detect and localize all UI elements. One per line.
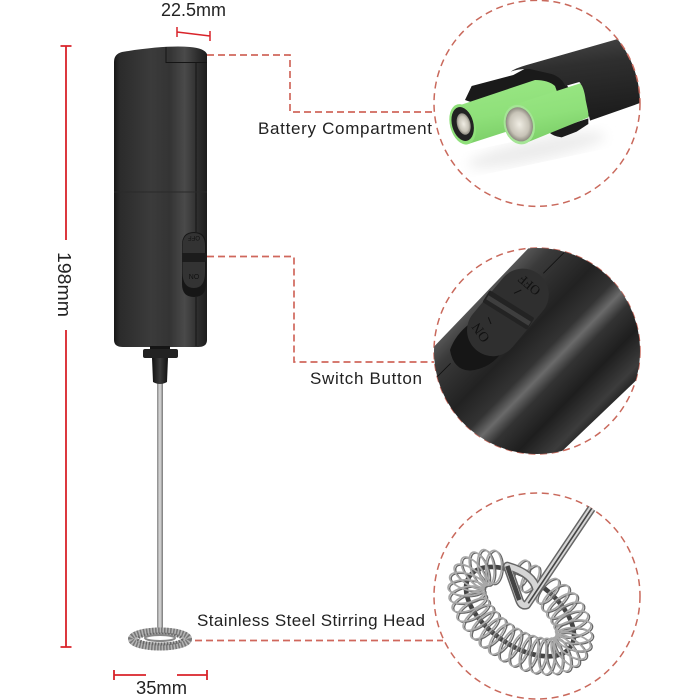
shadow bbox=[466, 125, 607, 175]
slider bbox=[467, 268, 548, 356]
circle outline bbox=[434, 493, 640, 699]
label: stirring head: Stainless Steel Stirring Head bbox=[197, 611, 425, 630]
dimension: height 198mm bbox=[54, 46, 74, 647]
circle outline bbox=[434, 0, 640, 206]
magnified body bbox=[434, 248, 640, 454]
drive stem bbox=[152, 358, 168, 384]
whisk head small bbox=[131, 630, 189, 648]
motor body bbox=[114, 47, 207, 347]
coil spring dark layer bbox=[449, 549, 594, 676]
body mid seam bbox=[114, 191, 207, 193]
label on: ON bbox=[470, 319, 494, 345]
whisk rod bbox=[157, 382, 163, 630]
recess bbox=[450, 326, 499, 370]
circle outline bbox=[434, 248, 640, 454]
lower tray bbox=[548, 118, 588, 137]
detail circle: battery compartment bbox=[434, 0, 653, 206]
leader line: battery compartment bbox=[207, 55, 434, 112]
switch label on: ON bbox=[189, 272, 199, 279]
switch label off: OFF bbox=[188, 234, 200, 240]
coil spring light layer bbox=[447, 548, 593, 675]
switch slider bbox=[182, 233, 205, 288]
label off: OFF bbox=[515, 272, 543, 299]
detail circle: stirring head bbox=[434, 493, 640, 699]
battery cover seams bbox=[166, 47, 207, 346]
front battery bbox=[499, 83, 589, 148]
switch recess bbox=[182, 232, 206, 297]
dimension: width 22.5mm: 22.5mm bbox=[161, 0, 226, 20]
detail circle: switch button bbox=[433, 247, 641, 455]
cover bbox=[510, 39, 640, 121]
leader line: switch button bbox=[207, 256, 434, 362]
back battery bbox=[445, 80, 560, 148]
label: battery compartment: Battery Compartment bbox=[258, 119, 432, 138]
collar bbox=[143, 349, 178, 358]
dimension: height 198mm: 198mm bbox=[54, 252, 74, 317]
frother device bbox=[114, 47, 207, 648]
label: switch button: Switch Button bbox=[310, 369, 422, 388]
switch bar bbox=[182, 253, 206, 262]
dimension: width 22.5mm bbox=[161, 0, 226, 41]
seam bbox=[437, 253, 564, 377]
leader line: stirring head bbox=[195, 640, 443, 642]
dimension: whisk width 35mm bbox=[114, 670, 207, 698]
back tray bbox=[465, 66, 593, 117]
dimension: whisk width 35mm: 35mm bbox=[136, 678, 187, 698]
neck bbox=[150, 346, 170, 351]
tick marks bbox=[488, 290, 521, 324]
spine wire bbox=[450, 549, 590, 674]
rod and bend bbox=[507, 508, 592, 605]
